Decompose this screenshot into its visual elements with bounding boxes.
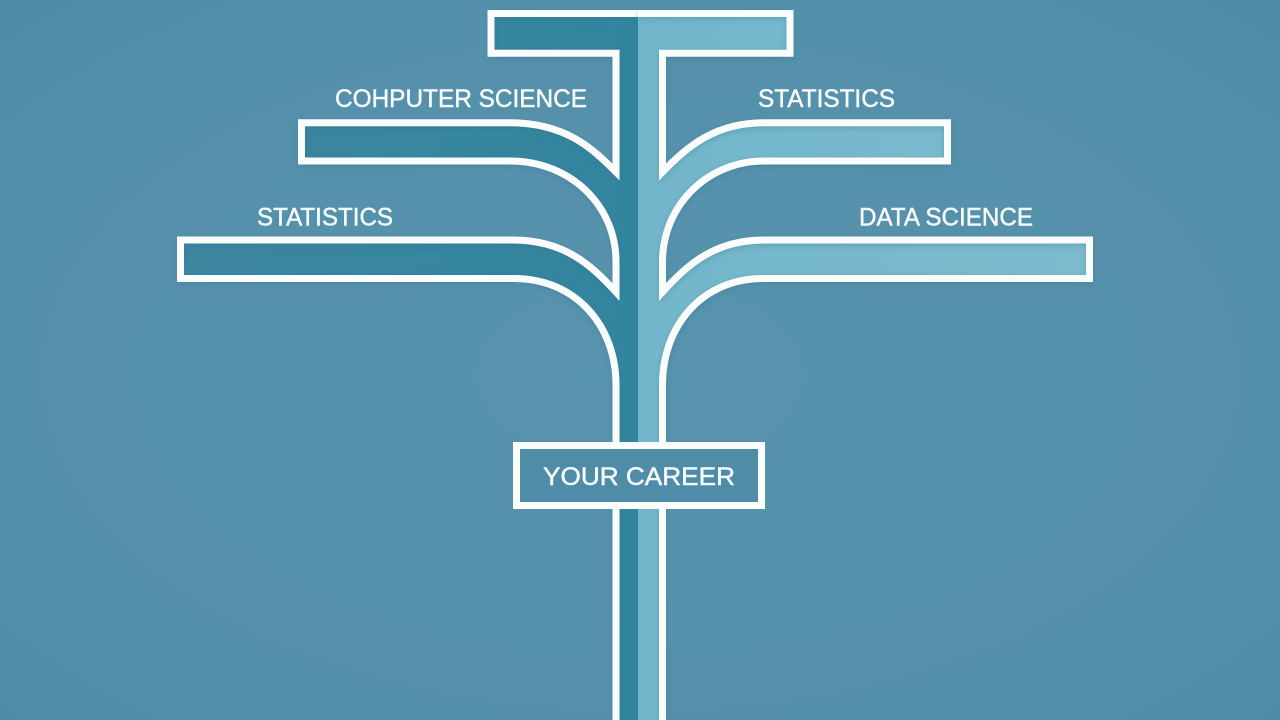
label: data science: DATA SCIENCE xyxy=(859,204,1033,232)
label: computer science: COHPUTER SCIENCE xyxy=(335,85,587,113)
your career box xyxy=(516,446,762,506)
left half of tree: computer science and statistics branches xyxy=(180,14,638,720)
label: your career: YOUR CAREER xyxy=(543,463,735,491)
label: statistics left: STATISTICS xyxy=(257,204,393,232)
right half of tree: statistics and data science branches xyxy=(638,14,1090,720)
label: statistics right: STATISTICS xyxy=(758,85,895,113)
